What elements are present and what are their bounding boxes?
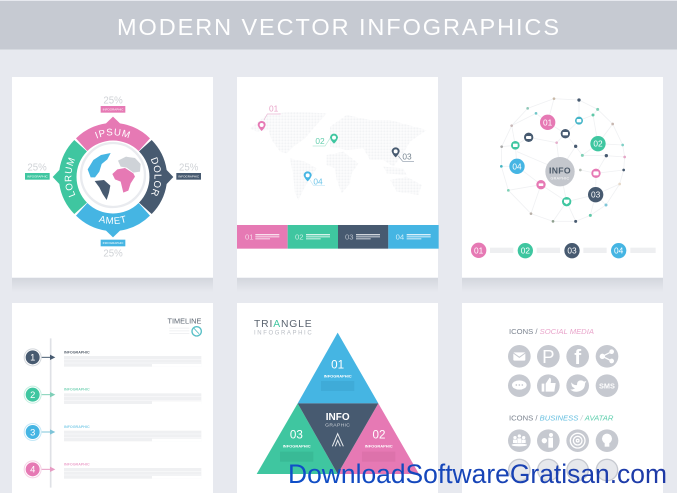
step 1 — [24, 348, 201, 367]
center node: info graphic — [545, 157, 575, 186]
center segment: info graphic: INFO — [326, 412, 350, 423]
header banner — [0, 1, 677, 50]
ring segment: amet: AMET — [98, 216, 126, 224]
legend item 04: 04 — [396, 233, 405, 242]
segment 03: INFOGRAPHIC — [283, 444, 311, 449]
heading: business / avatar: ICONS / BUSINESS / AVATAR — [509, 414, 614, 423]
segment 03: 03 — [290, 429, 303, 442]
label: bottom 25%: 25% — [103, 249, 123, 260]
step 2 — [24, 386, 201, 404]
step 04 — [611, 243, 626, 258]
watermark: DownloadSoftwareGratisan.com — [288, 459, 667, 489]
legend item 04 — [388, 225, 439, 249]
segment 02: INFOGRAPHIC — [365, 444, 393, 449]
label: bottom 25% — [101, 240, 125, 260]
ring segment: lorum: LORUM — [64, 158, 76, 198]
triangle heading — [254, 319, 312, 337]
node 01: 01 — [543, 117, 553, 127]
step 01 — [471, 243, 486, 258]
business icons — [508, 429, 618, 452]
pin 02: 02 — [315, 136, 325, 146]
step 1: INFOGRAPHIC — [64, 350, 90, 354]
panel: world map — [237, 77, 439, 292]
step 02: 02 — [521, 246, 530, 256]
step 4: INFOGRAPHIC — [64, 462, 90, 466]
ring segment: amet — [76, 203, 150, 238]
node 03 — [588, 187, 603, 202]
label: left 25%: 25% — [27, 162, 47, 173]
step 03 — [564, 243, 580, 258]
panel: timeline — [12, 303, 213, 493]
center node: info graphic: GRAPHIC — [550, 176, 570, 180]
node 02: 02 — [593, 139, 603, 149]
segment 02: 02 — [373, 429, 385, 442]
pin 04 — [304, 171, 325, 186]
pin 01 — [258, 104, 281, 131]
legend item 01: 01 — [245, 233, 254, 242]
title: MODERN VECTOR INFOGRAPHICS — [117, 14, 559, 40]
triangle heading: TRIANGLE — [254, 319, 312, 330]
node 02 — [590, 136, 606, 151]
pin 03 — [392, 147, 414, 162]
heading: social media: ICONS / SOCIAL MEDIA — [509, 327, 594, 336]
network lines — [501, 99, 625, 221]
legend item 03 — [338, 225, 388, 249]
step 3 — [24, 423, 201, 441]
panel: circular diagram — [12, 77, 213, 286]
step 3: INFOGRAPHIC — [64, 425, 90, 429]
legend item 03: 03 — [345, 233, 354, 242]
step 04: 04 — [614, 246, 624, 256]
step 3: 3 — [30, 427, 35, 437]
panel: network sphere — [462, 77, 663, 292]
legend item 02: 02 — [295, 233, 304, 242]
step 1: 1 — [30, 353, 35, 363]
step 01: 01 — [474, 245, 484, 255]
step 2: 2 — [30, 390, 35, 400]
step 02 — [518, 243, 533, 258]
social media icons: SMS — [599, 381, 615, 390]
step row legend — [471, 243, 656, 258]
panel: icons — [462, 303, 663, 493]
social media icons — [508, 345, 618, 397]
segment 02 — [338, 403, 419, 474]
social media icons: f — [574, 346, 581, 369]
timeline heading — [168, 316, 201, 336]
globe — [81, 143, 145, 207]
pin 04: 04 — [313, 176, 323, 186]
timeline axis — [48, 338, 53, 488]
legend item 01 — [237, 225, 288, 249]
ring segment: dolor — [139, 140, 174, 214]
label: right 25%: INFOGRAPHIC — [178, 174, 200, 178]
social media icons: P — [542, 346, 555, 367]
pin 01: 01 — [269, 104, 279, 114]
pin 03: 03 — [402, 152, 412, 162]
ring segment: ipsum: IPSUM — [95, 128, 130, 138]
legend item 02 — [288, 225, 338, 249]
step 4: 4 — [30, 465, 35, 475]
segment 01: INFOGRAPHIC — [324, 374, 352, 379]
label: top 25%: INFOGRAPHIC — [103, 107, 124, 111]
timeline heading: TIMELINE — [168, 316, 201, 325]
label: top 25% — [101, 95, 125, 113]
color bar legend — [237, 225, 439, 249]
label: bottom 25%: INFOGRAPHIC — [103, 241, 124, 245]
center segment: info graphic: GRAPHIC — [325, 423, 350, 429]
triangle heading: INFOGRAPHIC — [254, 331, 312, 337]
ring segment: dolor: DOLOR — [150, 157, 162, 196]
node 04 — [509, 159, 525, 174]
step 2: INFOGRAPHIC — [64, 388, 90, 392]
node 01 — [540, 115, 555, 130]
avatar icons — [509, 459, 618, 481]
node 04: 04 — [512, 161, 522, 171]
label: left 25%: INFOGRAPHIC — [27, 174, 49, 178]
segment 01 — [298, 333, 378, 403]
pin 02 — [313, 134, 338, 146]
center node: info graphic: INFO — [549, 165, 571, 175]
panel: triangle — [237, 303, 438, 493]
label: right 25%: 25% — [179, 162, 199, 173]
label: left 25% — [25, 162, 50, 180]
icon nodes — [511, 117, 601, 206]
ring segment: lorum — [52, 140, 87, 214]
label: right 25% — [176, 162, 201, 180]
network dots — [500, 97, 626, 223]
segment 01: 01 — [331, 358, 344, 371]
center segment: info graphic — [298, 403, 378, 474]
step 03: 03 — [567, 246, 577, 256]
step 4 — [24, 460, 201, 479]
label: top 25%: 25% — [103, 95, 123, 106]
node 03: 03 — [591, 190, 601, 200]
segment 03 — [257, 403, 338, 474]
dotted world map — [250, 112, 427, 200]
ring segment: ipsum — [76, 116, 150, 151]
